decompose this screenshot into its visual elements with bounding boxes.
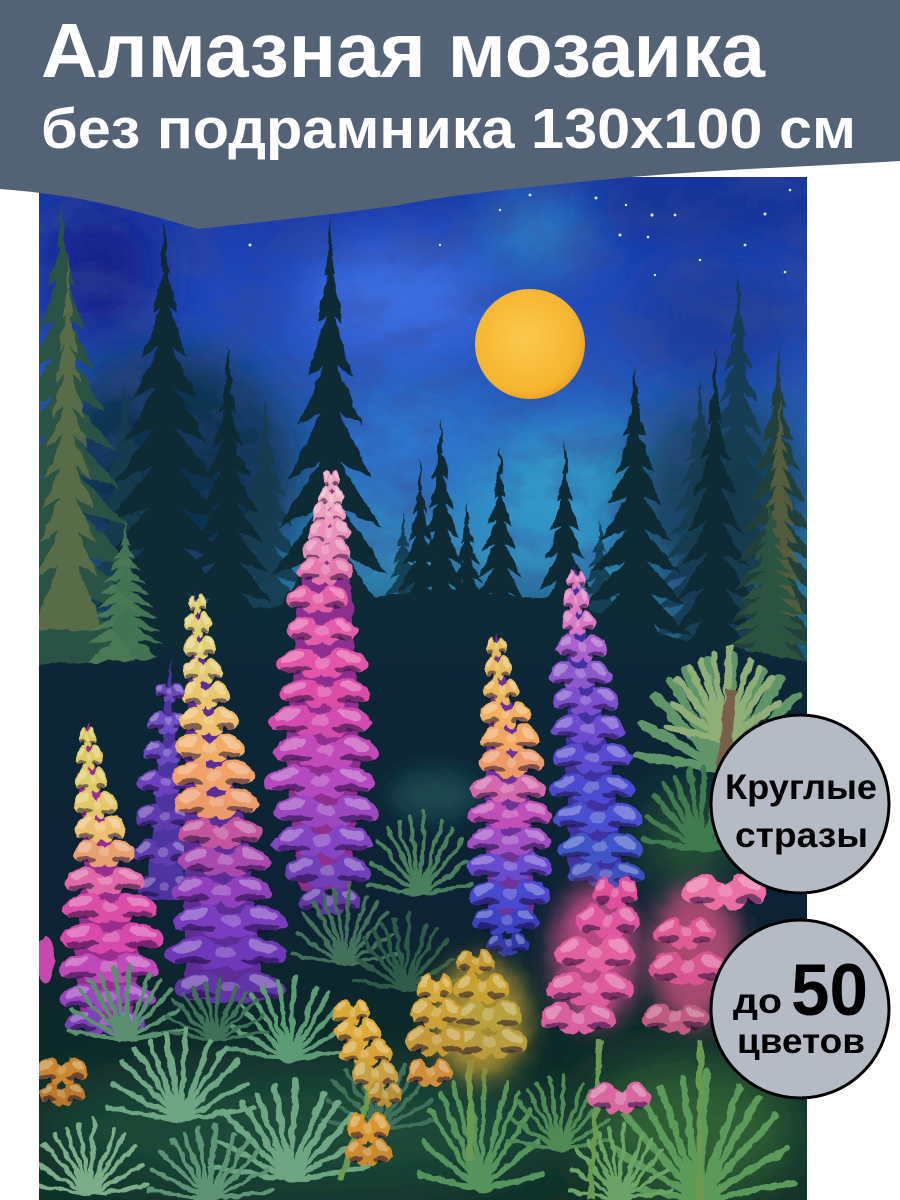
forest trees xyxy=(96,216,750,656)
badge: up to 50 colours: до xyxy=(733,982,782,1021)
badge: up to 50 colours xyxy=(711,920,889,1098)
badge: round rhinestones xyxy=(711,715,889,893)
top banner xyxy=(0,0,900,229)
small pink bloom at left edge xyxy=(37,936,55,984)
lupin: right purple blue xyxy=(547,565,646,887)
lupin: yellow to pink front left xyxy=(55,720,168,1035)
badge: round rhinestones: стразы xyxy=(735,816,868,855)
right spiky plant xyxy=(637,649,813,850)
artwork: night forest with lupins xyxy=(39,177,807,1200)
sky xyxy=(39,177,807,662)
badge: up to 50 colours: 50 xyxy=(791,950,868,1031)
yellow blossoms xyxy=(36,946,530,1167)
olive firs at edges xyxy=(0,200,835,705)
lupin: purple back left xyxy=(134,658,186,900)
subtitle: без подрамника 130х100 см xyxy=(41,97,856,161)
distant trees xyxy=(90,268,771,650)
moon xyxy=(475,289,585,399)
stars xyxy=(248,189,791,276)
badge: round rhinestones: Круглые xyxy=(725,768,877,807)
lupin: yellow to purple left xyxy=(162,590,291,1004)
lupin: center tall pink xyxy=(262,467,382,915)
sky texture xyxy=(39,177,807,626)
lupin: orange pink blue mid xyxy=(466,632,554,956)
pink flowers front right xyxy=(538,868,770,1114)
badge: up to 50 colours: цветов xyxy=(737,1022,865,1061)
foreground green foliage xyxy=(33,811,811,1200)
title: Алмазная мозаика xyxy=(41,8,766,94)
forest floor xyxy=(20,590,830,1200)
